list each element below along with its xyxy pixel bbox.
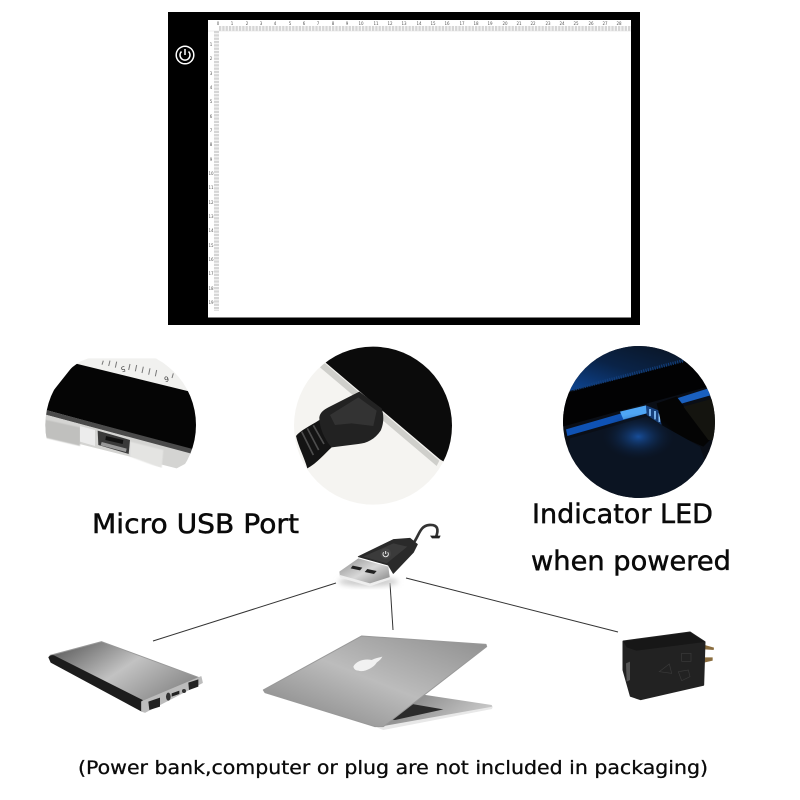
connector line: USB to laptop (390, 583, 393, 630)
left ruler (208, 31, 219, 311)
top ruler: 9 (346, 21, 349, 26)
left ruler: 1 (210, 42, 213, 47)
top ruler: 13 (401, 21, 407, 26)
label: Indicator LED: Indicator LED (532, 499, 713, 530)
left ruler: 19 (208, 300, 214, 305)
connector line: USB to wall plug (406, 578, 618, 632)
footnote: (Power bank,computer or plug are not included in packaging) (78, 757, 708, 779)
icon: USB plug (338, 525, 441, 586)
label: Micro USB Port: Micro USB Port (92, 509, 299, 540)
top ruler: 2 (246, 21, 249, 26)
left ruler: 3 (210, 71, 213, 76)
top ruler: 4 (274, 21, 277, 26)
top ruler: 10 (358, 21, 364, 26)
light pad illuminated surface (208, 20, 631, 318)
icon: power bank (48, 642, 202, 712)
top ruler: 19 (487, 21, 493, 26)
left ruler: 9 (210, 157, 213, 162)
top ruler: 16 (444, 21, 450, 26)
micro USB socket (98, 431, 130, 454)
top ruler: 1 (231, 21, 234, 26)
top ruler: 27 (602, 21, 608, 26)
light pad tablet (168, 12, 640, 325)
top ruler: 24 (559, 21, 565, 26)
photo: micro USB port close-up (45, 358, 196, 468)
top ruler: 21 (516, 21, 522, 26)
top ruler: 18 (473, 21, 479, 26)
left ruler: 8 (210, 142, 213, 147)
left ruler: 10 (208, 171, 214, 176)
photo: USB cable plugged in (294, 346, 452, 504)
top ruler: 5 (289, 21, 292, 26)
left ruler: 12 (208, 200, 214, 205)
top ruler: 20 (502, 21, 508, 26)
top ruler: 11 (373, 21, 379, 26)
left ruler: 4 (210, 85, 213, 90)
top ruler: 3 (260, 21, 263, 26)
top ruler: 23 (545, 21, 551, 26)
left ruler: 18 (208, 286, 214, 291)
top ruler: 15 (430, 21, 436, 26)
icon: laptop (263, 636, 493, 730)
connector line: USB to power bank (153, 583, 336, 641)
left ruler: 2 (210, 56, 213, 61)
apple logo (353, 657, 382, 671)
left ruler: 11 (208, 185, 214, 190)
top ruler: 0 (217, 21, 220, 26)
top ruler (208, 20, 631, 31)
top ruler: 6 (303, 21, 306, 26)
USB plug body (296, 392, 383, 468)
left ruler: 5 (210, 99, 213, 104)
top ruler: 25 (573, 21, 579, 26)
left ruler: 16 (208, 257, 214, 262)
photo: micro USB port close-up: 6 (163, 374, 170, 384)
photo: blue indicator LED (563, 346, 715, 498)
left ruler: 13 (208, 214, 214, 219)
top ruler: 12 (387, 21, 393, 26)
top ruler: 8 (332, 21, 335, 26)
left ruler: 6 (210, 114, 213, 119)
top ruler: 14 (416, 21, 422, 26)
top ruler: 28 (616, 21, 622, 26)
top ruler: 22 (530, 21, 536, 26)
photo: micro USB port close-up: 5 (119, 364, 127, 374)
left ruler: 17 (208, 271, 214, 276)
top ruler: 26 (588, 21, 594, 26)
top ruler: 7 (317, 21, 320, 26)
left ruler: 15 (208, 243, 214, 248)
icon: power button (176, 46, 194, 64)
left ruler: 7 (210, 128, 213, 133)
top ruler: 17 (459, 21, 465, 26)
icon: wall plug adapter (623, 632, 714, 699)
left ruler: 14 (208, 228, 214, 233)
label: when powered: when powered (531, 546, 731, 577)
